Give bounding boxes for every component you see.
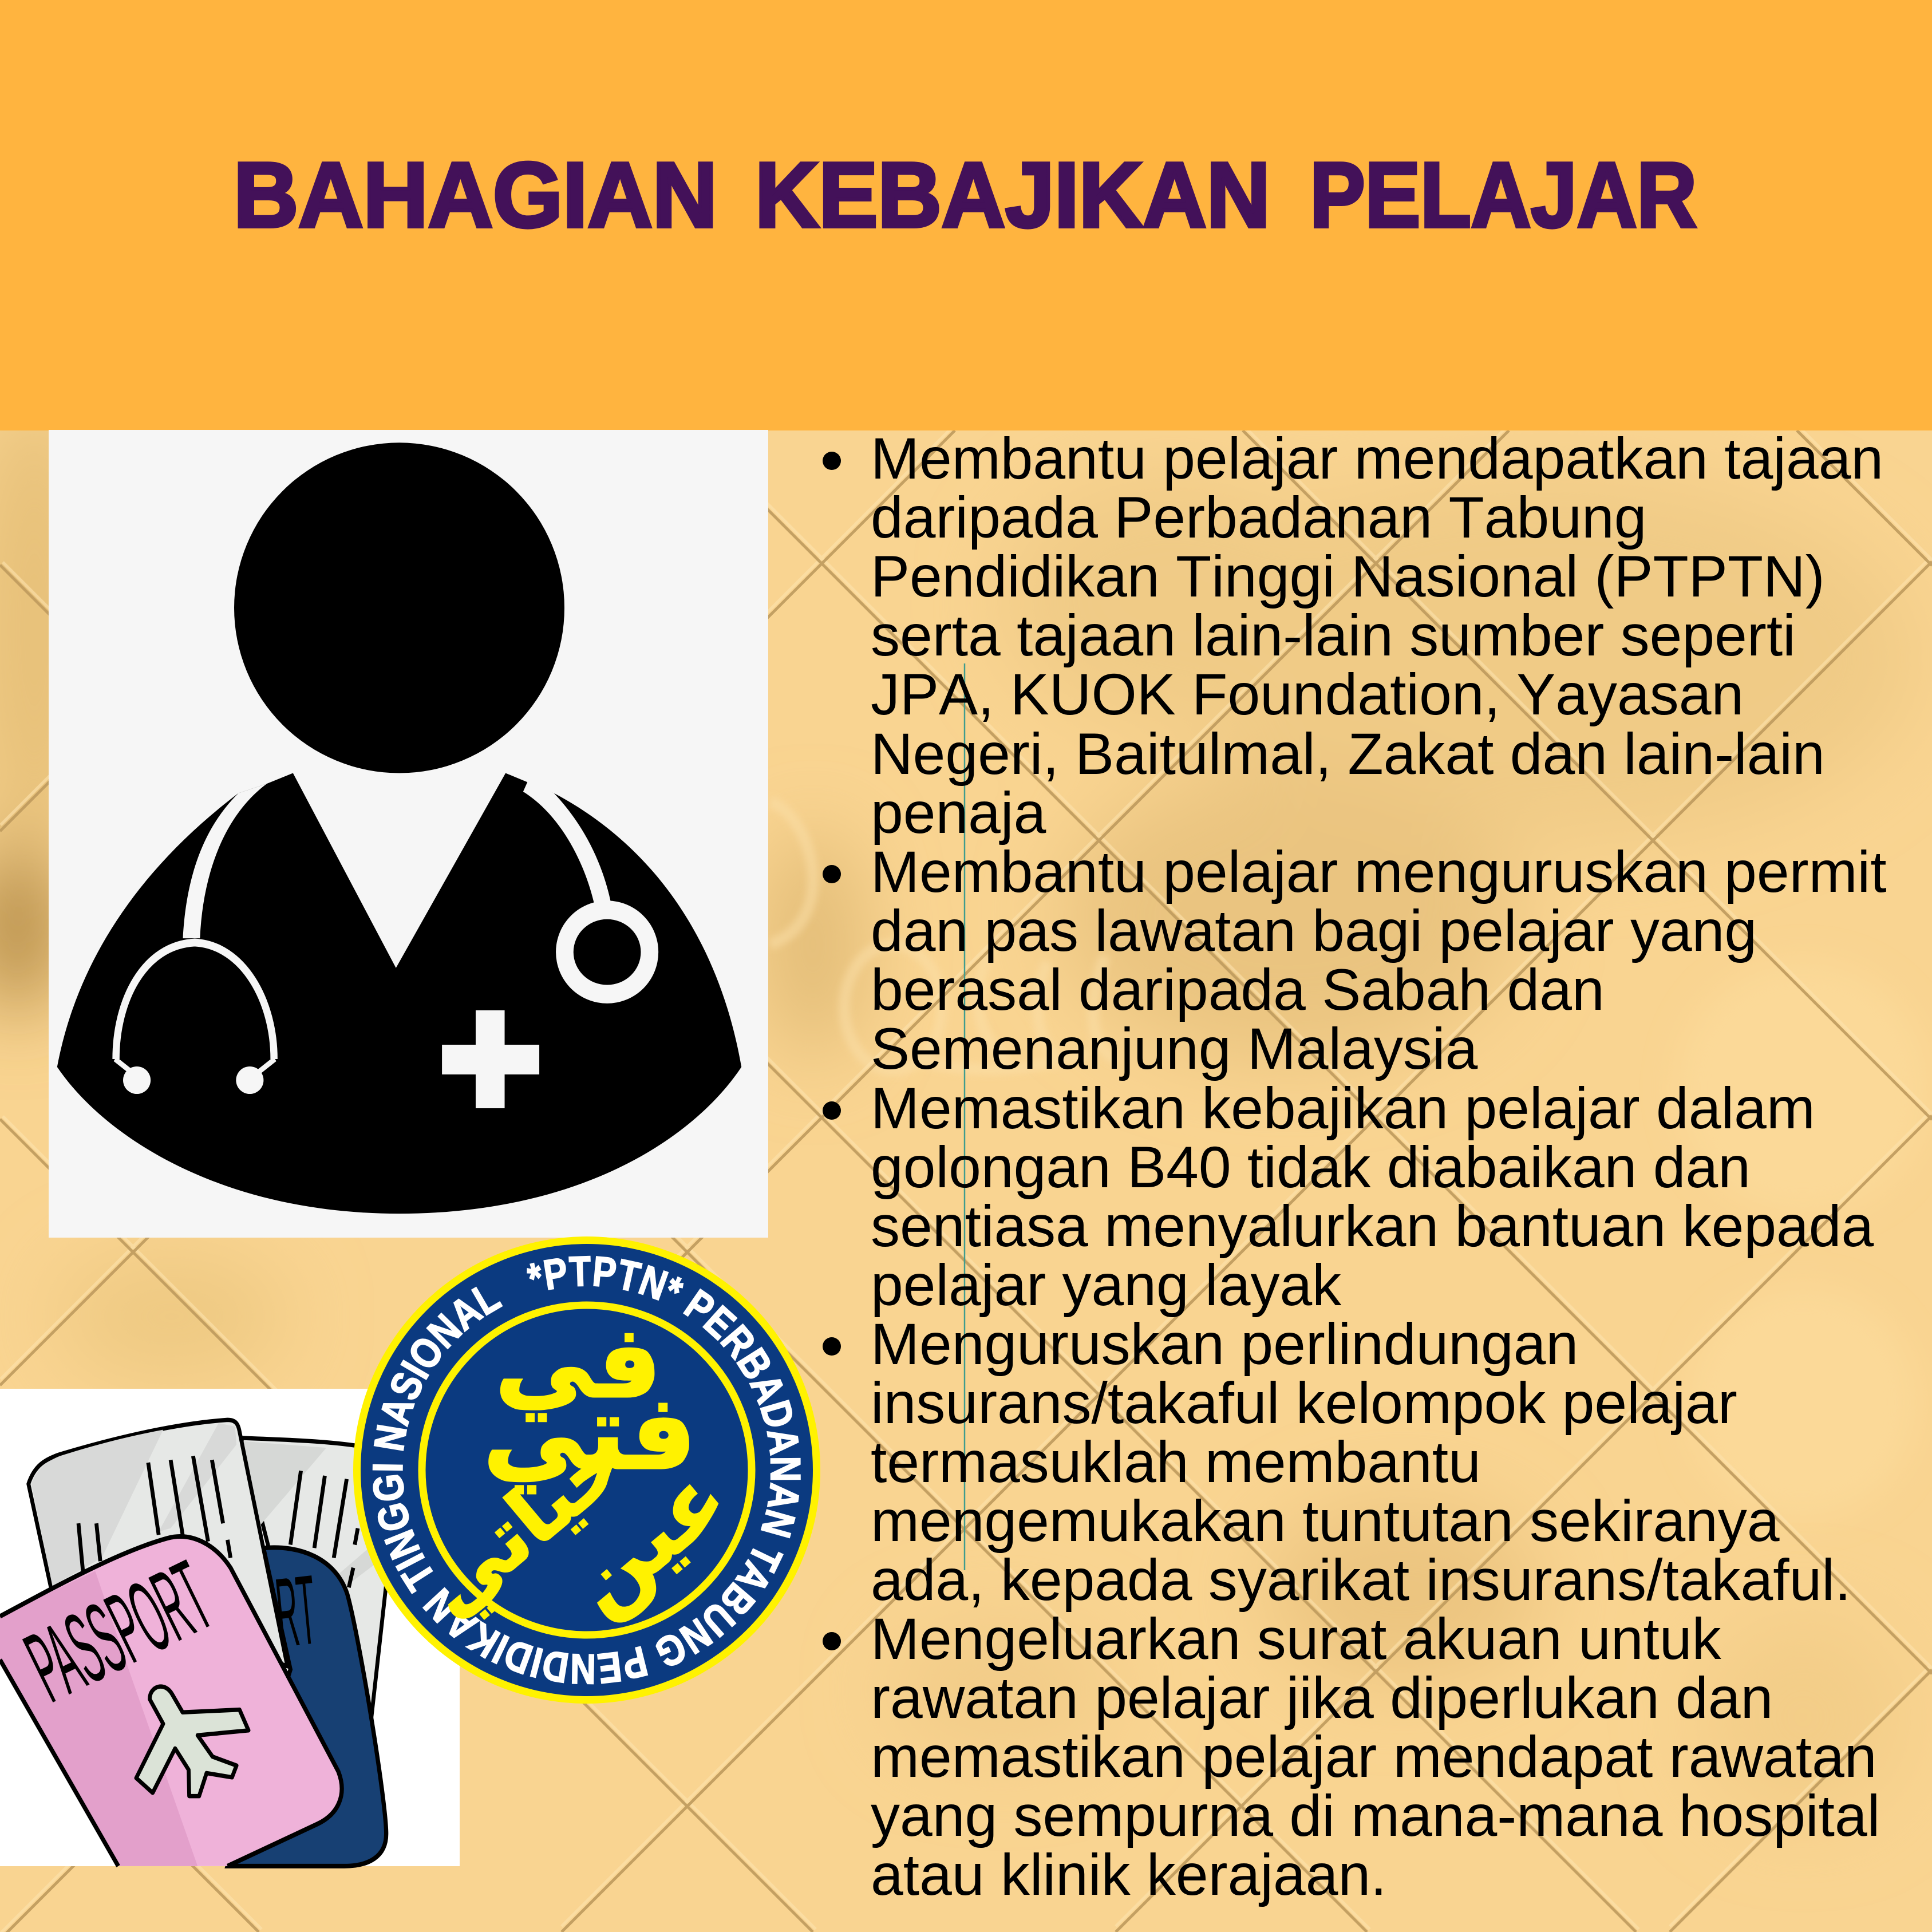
icon: airplane (136, 1686, 248, 1796)
bullet 5 (823, 1606, 1880, 1907)
icon: doctor head (234, 442, 564, 773)
bullet 2: Membantu pelajar menguruskan permit (871, 839, 1887, 904)
bullet 2: dan pas lawatan bagi pelajar yang (871, 898, 1757, 963)
pink passport (0, 1536, 342, 1866)
badge calligraphy: حياتي (405, 1415, 642, 1635)
badge calligraphy: عين (551, 1447, 746, 1634)
vertical guide line (964, 663, 965, 1570)
header band (0, 0, 1932, 430)
badge calligraphy (405, 1305, 746, 1635)
back ticket (241, 1438, 386, 1719)
bullet 5: memastikan pelajar mendapat rawatan (871, 1724, 1877, 1789)
bullet 3 (823, 1076, 1874, 1318)
lattice highlights (1, 428, 1932, 1932)
icon: medical cross (442, 1010, 539, 1108)
bullet 1: Membantu pelajar mendapatkan tajaan (871, 426, 1883, 491)
bullet 3: sentiasa menyalurkan bantuan kepada (871, 1194, 1874, 1259)
bullet 5: Mengeluarkan surat akuan untuk (871, 1606, 1722, 1672)
bullet 3: Memastikan kebajikan pelajar dalam (871, 1076, 1815, 1141)
background: golden quilted texture (0, 389, 1932, 1932)
bullet 5: rawatan pelajar jika diperlukan dan (871, 1665, 1773, 1730)
text block: bullet list (823, 426, 1887, 1907)
PTPTN logo badge (353, 1236, 820, 1704)
bullet 4: insurans/takaful kelompok pelajar (871, 1370, 1737, 1436)
bullet 1 (823, 426, 1883, 846)
bullet 1: JPA, KUOK Foundation, Yayasan (871, 662, 1744, 727)
bullet 1: serta tajaan lain-lain sumber seperti (871, 603, 1796, 668)
lattice lines (0, 430, 1932, 1932)
bullet 4: mengemukakan tuntutan sekiranya (871, 1488, 1780, 1554)
bullet 1: Negeri, Baitulmal, Zakat dan lain-lain (871, 721, 1825, 787)
badge ring text: *PTPTN* PERBADANAN TABUNG PENDIDIKAN TINGGI NASIONAL (372, 1256, 801, 1684)
bullet 4 (823, 1311, 1851, 1613)
panel: doctor icon (49, 430, 768, 1238)
bullet 5: atau klinik kerajaan. (871, 1842, 1387, 1907)
title: PELAJAR (1310, 144, 1697, 247)
badge calligraphy: في (495, 1305, 662, 1421)
bullet 2 (823, 839, 1887, 1081)
bullet 1: daripada Perbadanan Tabung (871, 485, 1646, 550)
bullet 4: termasuklah membantu (871, 1429, 1481, 1495)
title: KEBAJIKAN (755, 144, 1270, 247)
bullet 5: yang sempurna di mana-mana hospital (871, 1783, 1880, 1848)
icon: doctor body (57, 773, 741, 1214)
blue passport (227, 1547, 386, 1866)
bullet 3: golongan B40 tidak diabaikan dan (871, 1135, 1751, 1200)
bullet 4: Menguruskan perlindungan (871, 1311, 1578, 1377)
bullet 4: ada, kepada syarikat insurans/takaful. (871, 1547, 1851, 1613)
front ticket (29, 1420, 287, 1666)
icon: stethoscope (115, 781, 658, 1094)
bullet 2: Semenanjung Malaysia (871, 1016, 1478, 1081)
title: BAHAGIAN (234, 144, 717, 247)
bullet 3: pelajar yang layak (871, 1253, 1342, 1318)
panel: passport illustration (0, 1389, 460, 1866)
panel: passport illustration: PASSPORT (10, 1539, 227, 1723)
bullet 1: penaja (871, 780, 1046, 846)
bullet 1: Pendidikan Tinggi Nasional (PTPTN) (871, 544, 1825, 609)
blue passport: RT (271, 1554, 321, 1668)
title (234, 144, 1697, 247)
bullet 2: berasal daripada Sabah dan (871, 957, 1605, 1022)
badge calligraphy: فتي (483, 1373, 697, 1494)
